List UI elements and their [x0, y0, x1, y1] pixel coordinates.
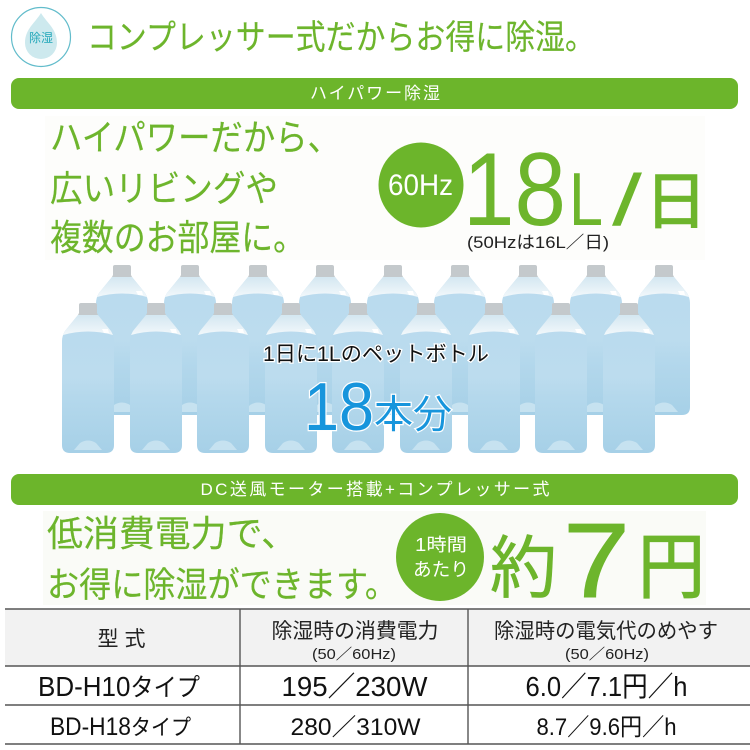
- table header: electricity cost: [494, 620, 718, 663]
- title: コンプレッサー式だからお得に除湿。: [87, 19, 595, 57]
- banner: DC fan motor and compressor: DC送風モーター搭載+コンプレッサー式: [200, 480, 550, 499]
- figure: 18L per day: /: [612, 161, 642, 241]
- table header: power consumption: 除湿時の消費電力: [272, 620, 438, 643]
- text block: low power headline: 低消費電力で、: [47, 513, 297, 554]
- table row: BD-H18: 280／310W: [290, 714, 421, 741]
- table row: BD-H10: 195／230W: [282, 671, 428, 702]
- table header: model: 型 式: [98, 628, 146, 651]
- figure: 18L per day: [463, 132, 707, 248]
- panel background: low power: [43, 511, 706, 605]
- figure: 18 bottles: 18: [304, 369, 374, 445]
- illustration: back row of bottles: [96, 265, 690, 415]
- figure: 18L per day: 18: [463, 132, 566, 248]
- figure: 18L per day: L: [569, 157, 603, 241]
- table header: electricity cost: (50／60Hz): [565, 646, 649, 663]
- table row: BD-H18: BD-H18タイプ: [50, 713, 191, 741]
- text block: low power headline: お得に除湿ができます。: [47, 566, 397, 605]
- banner: high power dehumidification: [11, 78, 738, 109]
- figure: about 7 yen: [490, 502, 705, 620]
- icon: dehumidify water drop badge: 除湿: [29, 30, 53, 45]
- banner: high power dehumidification: ハイパワー除湿: [310, 84, 440, 103]
- note: 50Hz value: (50Hzは16L／日): [467, 233, 609, 252]
- badge: 60Hz: [378, 142, 464, 228]
- figure: about 7 yen: 約: [490, 531, 557, 607]
- panel background: high power: [45, 116, 705, 260]
- text block: high power headline: 複数のお部屋に。: [50, 217, 305, 258]
- text block: high power headline: 広いリビングや: [50, 168, 278, 209]
- table row: BD-H10: 6.0／7.1円／h: [526, 671, 688, 702]
- figure: 18 bottles: 本分: [374, 394, 452, 437]
- text block: high power headline: [50, 117, 340, 258]
- table row: BD-H10: BD-H10タイプ: [38, 671, 200, 702]
- badge: per hour: 1時間: [415, 535, 467, 555]
- table row: BD-H18: [50, 713, 676, 741]
- table row: BD-H18: 8.7／9.6円／h: [536, 714, 676, 741]
- badge: 60Hz: 60Hz: [388, 169, 453, 202]
- table header: power consumption: [272, 620, 438, 663]
- banner: DC fan motor and compressor: [11, 474, 738, 505]
- icon: dehumidify water drop badge: [12, 8, 70, 66]
- caption: one litre bottles per day: 1日に1Lのペットボトル: [263, 343, 489, 366]
- table: model comparison: [5, 609, 750, 744]
- figure: about 7 yen: 円: [638, 528, 705, 608]
- badge: per hour: あたり: [413, 559, 469, 580]
- figure: 18 bottles: [304, 369, 452, 445]
- figure: 18L per day: 日: [645, 168, 707, 237]
- illustration: front row of bottles: [62, 303, 655, 453]
- text block: high power headline: ハイパワーだから、: [50, 117, 340, 158]
- figure: about 7 yen: 7: [563, 502, 630, 620]
- table header: power consumption: (50／60Hz): [312, 646, 396, 663]
- table header: electricity cost: 除湿時の電気代のめやす: [494, 620, 718, 643]
- text block: low power headline: [47, 513, 397, 605]
- table row: BD-H10: [38, 671, 688, 702]
- badge: per hour: [396, 513, 484, 601]
